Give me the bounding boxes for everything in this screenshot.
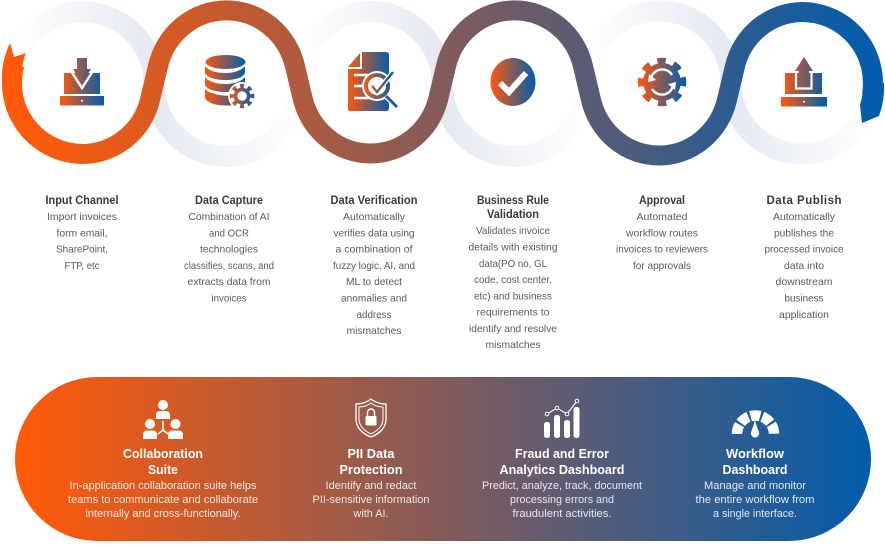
winding process ribbon with arrow ends bbox=[2, 10, 884, 156]
capability text: fraud and error analytics dashboard: Analytics Dashboard bbox=[500, 462, 625, 477]
step text: business rule validation: Validation bbox=[487, 209, 539, 221]
step text: input channel: Input Channel bbox=[46, 195, 118, 207]
capability text: fraud and error analytics dashboard bbox=[482, 446, 642, 520]
capability text: collaboration suite: teams to communicate and collaborate bbox=[68, 494, 258, 506]
step text: data publish: downstream bbox=[776, 276, 833, 288]
step text: data verification: mismatches bbox=[346, 325, 402, 337]
step text: approval: for approvals bbox=[633, 260, 691, 272]
step text: data publish: Automatically bbox=[773, 211, 836, 223]
step text: data capture: invoices bbox=[212, 292, 246, 304]
step text: data capture: Data Capture bbox=[195, 195, 263, 207]
step text: data publish bbox=[764, 195, 844, 321]
capability text: fraud and error analytics dashboard: processing errors and bbox=[510, 494, 614, 506]
step text: approval bbox=[616, 195, 708, 272]
step text: input channel: SharePoint, bbox=[56, 244, 108, 256]
step text: data verification bbox=[330, 195, 418, 337]
capability text: PII data protection bbox=[312, 446, 430, 520]
icon: analytics bar and line chart bbox=[544, 399, 580, 438]
capability text: PII data protection: PII-sensitive information bbox=[312, 494, 430, 506]
step text: approval: workflow routes bbox=[625, 227, 698, 239]
step text: data publish: Data Publish bbox=[766, 195, 842, 207]
step text: data publish: data into bbox=[784, 260, 824, 272]
step text: approval: Automated bbox=[636, 211, 688, 223]
icon: business rule check badge bbox=[490, 58, 536, 106]
step text: business rule validation: Business Rule bbox=[477, 195, 549, 207]
capability text: collaboration suite bbox=[68, 446, 258, 520]
step text: data publish: processed invoice bbox=[764, 244, 844, 256]
icon: workflow gauge bbox=[737, 416, 774, 438]
capability text: collaboration suite: In-application collaboration suite helps bbox=[70, 480, 257, 492]
step text: approval: Approval bbox=[639, 195, 685, 207]
panel: platform capabilities band bbox=[15, 377, 871, 541]
step text: data verification: anomalies and bbox=[341, 292, 407, 304]
step text: input channel: form email, bbox=[56, 227, 108, 239]
step text: input channel bbox=[46, 195, 118, 272]
step text: data capture: extracts data from bbox=[188, 276, 271, 288]
step text: input channel: Import invoices bbox=[47, 211, 117, 223]
step text: data capture: and OCR bbox=[209, 227, 249, 239]
step text: business rule validation: requirements to bbox=[476, 307, 550, 319]
capability text: PII data protection: PII Data bbox=[348, 446, 395, 461]
capability text: PII data protection: with AI. bbox=[353, 508, 388, 520]
step text: data verification: fuzzy logic, AI, and bbox=[333, 260, 415, 272]
step text: business rule validation: data(PO no, GL bbox=[479, 258, 547, 270]
capability text: collaboration suite: Suite bbox=[148, 462, 178, 477]
icon: approval workflow gear bbox=[641, 61, 683, 103]
step text: data verification: Automatically bbox=[343, 211, 406, 223]
capability text: collaboration suite: internally and cross-functionally. bbox=[86, 508, 240, 520]
step text: data capture: Combination of AI bbox=[188, 211, 270, 223]
step text: business rule validation: Validates invoice bbox=[476, 225, 550, 237]
step text: business rule validation: details with existing bbox=[468, 242, 558, 254]
icon: security shield with lock bbox=[356, 399, 386, 437]
step text: data verification: Data Verification bbox=[330, 195, 418, 207]
step text: business rule validation: code, cost center, bbox=[474, 274, 552, 286]
step text: data verification: a combination of bbox=[336, 244, 413, 256]
capability text: workflow dashboard bbox=[696, 446, 814, 520]
step text: data capture: technologies bbox=[200, 244, 258, 256]
step text: data publish: publishes the bbox=[774, 227, 834, 239]
step text: business rule validation bbox=[468, 195, 558, 351]
capability text: workflow dashboard: a single interface. bbox=[713, 508, 797, 520]
step text: data verification: address bbox=[356, 309, 392, 321]
step text: approval: invoices to reviewers bbox=[616, 244, 708, 256]
step text: data capture bbox=[184, 195, 274, 304]
capability text: workflow dashboard: Manage and monitor bbox=[704, 480, 806, 492]
step text: business rule validation: identify and resolve bbox=[469, 323, 557, 335]
capability text: fraud and error analytics dashboard: Predict, analyze, track, document bbox=[482, 480, 642, 492]
step text: input channel: FTP, etc bbox=[64, 260, 100, 272]
step text: business rule validation: mismatches bbox=[486, 339, 540, 351]
capability text: fraud and error analytics dashboard: fraudulent activities. bbox=[512, 508, 612, 520]
capability text: PII data protection: Identify and redact bbox=[326, 480, 416, 492]
icon: data publish upload bbox=[781, 57, 827, 106]
step text: data verification: verifies data using bbox=[334, 227, 415, 239]
step text: data publish: application bbox=[779, 309, 829, 321]
icon: input channel download bbox=[60, 58, 104, 106]
pale background rings bbox=[16, 11, 873, 156]
capability text: collaboration suite: Collaboration bbox=[123, 446, 203, 461]
capability text: workflow dashboard: the entire workflow from bbox=[696, 494, 814, 506]
step text: data verification: ML to detect bbox=[346, 276, 402, 288]
capability text: PII data protection: Protection bbox=[340, 462, 403, 477]
icon: data capture database and gear bbox=[205, 55, 256, 110]
capability text: fraud and error analytics dashboard: Fraud and Error bbox=[515, 446, 609, 461]
icon: collaboration people bbox=[143, 400, 183, 439]
capability text: workflow dashboard: Dashboard bbox=[722, 462, 788, 477]
capability text: workflow dashboard: Workflow bbox=[726, 446, 785, 461]
step text: data publish: business bbox=[784, 292, 824, 304]
step text: business rule validation: etc) and business bbox=[474, 290, 552, 302]
step text: data capture: classifies, scans, and bbox=[184, 260, 274, 272]
icon: data verification document and magnifier bbox=[348, 52, 397, 111]
